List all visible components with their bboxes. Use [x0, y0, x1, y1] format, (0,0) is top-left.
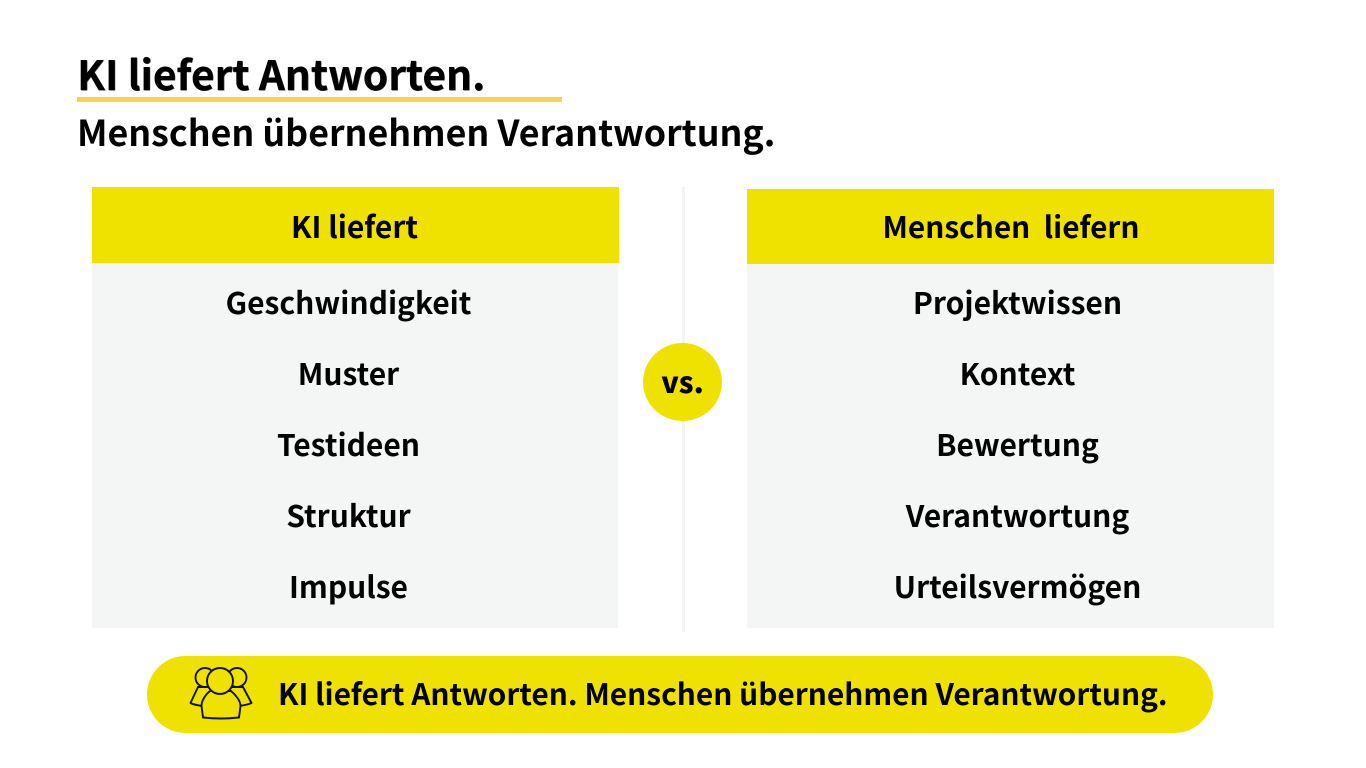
title underline — [77, 97, 562, 102]
item: Geschwindigkeit: Geschwindigkeit — [226, 279, 471, 323]
panel: KI liefert — [92, 187, 619, 628]
callout banner — [147, 656, 1213, 733]
item: Projektwissen: Projektwissen — [913, 279, 1122, 323]
callout text: KI liefert Antworten. Menschen übernehmen Verantwortung. — [278, 670, 1168, 714]
heading: Menschen liefern: Menschen liefern — [882, 203, 1140, 247]
panel header left — [92, 187, 619, 263]
title: line 2: Menschen übernehmen Verantwortung. — [77, 106, 775, 157]
item: Testideen: Testideen — [277, 421, 420, 465]
center divider — [682, 187, 685, 632]
title: line 1: KI liefert Antworten. — [77, 43, 485, 102]
panel: Menschen liefern — [747, 189, 1274, 628]
item: Verantwortung: Verantwortung — [906, 492, 1129, 536]
vs text: vs. — [661, 360, 704, 402]
item: Urteilsvermögen: Urteilsvermögen — [894, 563, 1141, 607]
heading: KI liefert: KI liefert — [291, 203, 418, 247]
item: Bewertung: Bewertung — [936, 421, 1099, 465]
vs badge — [643, 343, 722, 421]
item: Muster: Muster — [298, 350, 399, 394]
item: Kontext: Kontext — [960, 350, 1075, 394]
icon: people group — [190, 667, 252, 720]
panel body right — [747, 264, 1274, 628]
item: Impulse: Impulse — [289, 563, 408, 607]
panel body left — [92, 263, 618, 628]
panel header right — [747, 189, 1274, 264]
item: Struktur: Struktur — [286, 492, 411, 536]
